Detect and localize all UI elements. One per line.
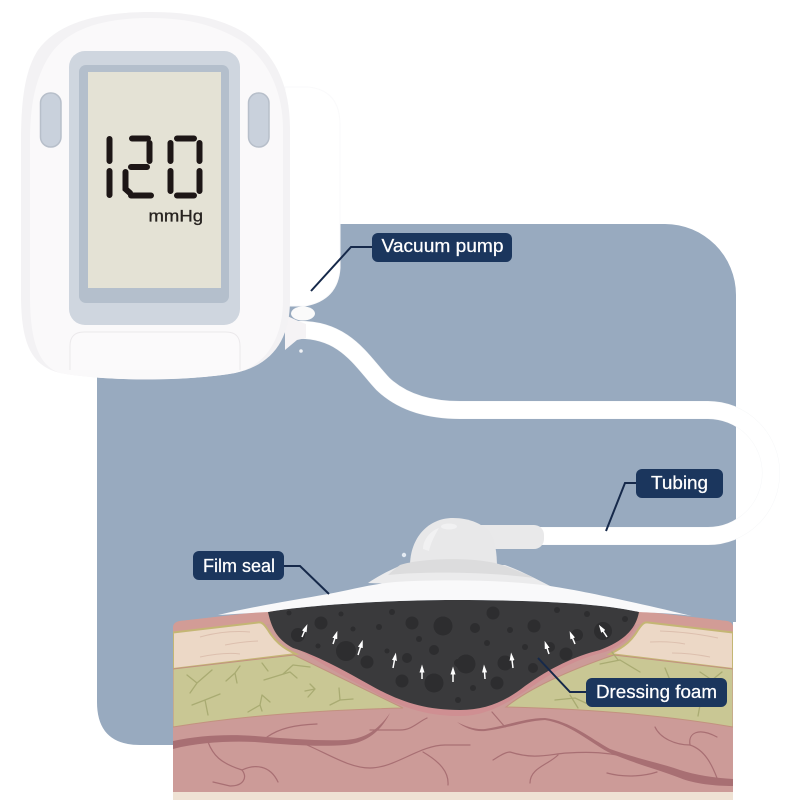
label: dressing foam: Dressing foam xyxy=(596,682,717,702)
cream dermis right xyxy=(610,622,733,669)
unit label: mmHg xyxy=(148,206,203,226)
left side button xyxy=(40,93,61,147)
screen bezel xyxy=(69,51,240,325)
subcutaneous base xyxy=(173,792,733,800)
background panel xyxy=(97,224,736,745)
dressing foam xyxy=(268,600,639,710)
screen inner frame xyxy=(79,65,229,303)
dome highlights xyxy=(423,528,439,551)
film seal xyxy=(218,559,692,616)
tubing xyxy=(296,330,771,536)
reading: 120 xyxy=(110,138,200,196)
vacuum pump body xyxy=(285,87,340,306)
device port xyxy=(285,306,315,353)
foam pores xyxy=(286,606,628,703)
fat cell cracks xyxy=(187,652,722,716)
label: vacuum pump xyxy=(311,233,512,291)
LCD screen xyxy=(88,72,221,288)
monitor device xyxy=(21,12,290,379)
blood vessels xyxy=(173,712,733,786)
film seal mid flange xyxy=(388,559,534,578)
film seal outer flange xyxy=(368,565,558,590)
muscle layer xyxy=(173,605,733,800)
wound bed border xyxy=(280,625,636,716)
label: tubing: Tubing xyxy=(651,473,708,493)
label: vacuum pump: Vacuum pump xyxy=(382,236,504,256)
label: film seal: Film seal xyxy=(203,556,275,576)
dermis texture lines xyxy=(200,631,718,657)
monitor casing face xyxy=(30,18,283,379)
label: dressing foam xyxy=(538,658,727,707)
dome connector xyxy=(470,525,544,549)
film seal sheet xyxy=(218,580,692,616)
suction port dome xyxy=(402,518,544,568)
lower cover xyxy=(70,332,240,370)
fat layer right xyxy=(506,655,733,727)
foam body xyxy=(268,600,639,710)
label: film seal xyxy=(193,551,329,594)
label: tubing xyxy=(606,469,723,531)
monitor casing xyxy=(21,12,290,379)
dome xyxy=(410,518,497,568)
epidermis top band xyxy=(173,612,733,628)
fat layer left xyxy=(173,655,403,727)
right side button xyxy=(248,93,269,147)
suction arrows xyxy=(302,631,607,682)
skin cross-section xyxy=(173,605,733,800)
cream dermis left xyxy=(173,622,296,669)
